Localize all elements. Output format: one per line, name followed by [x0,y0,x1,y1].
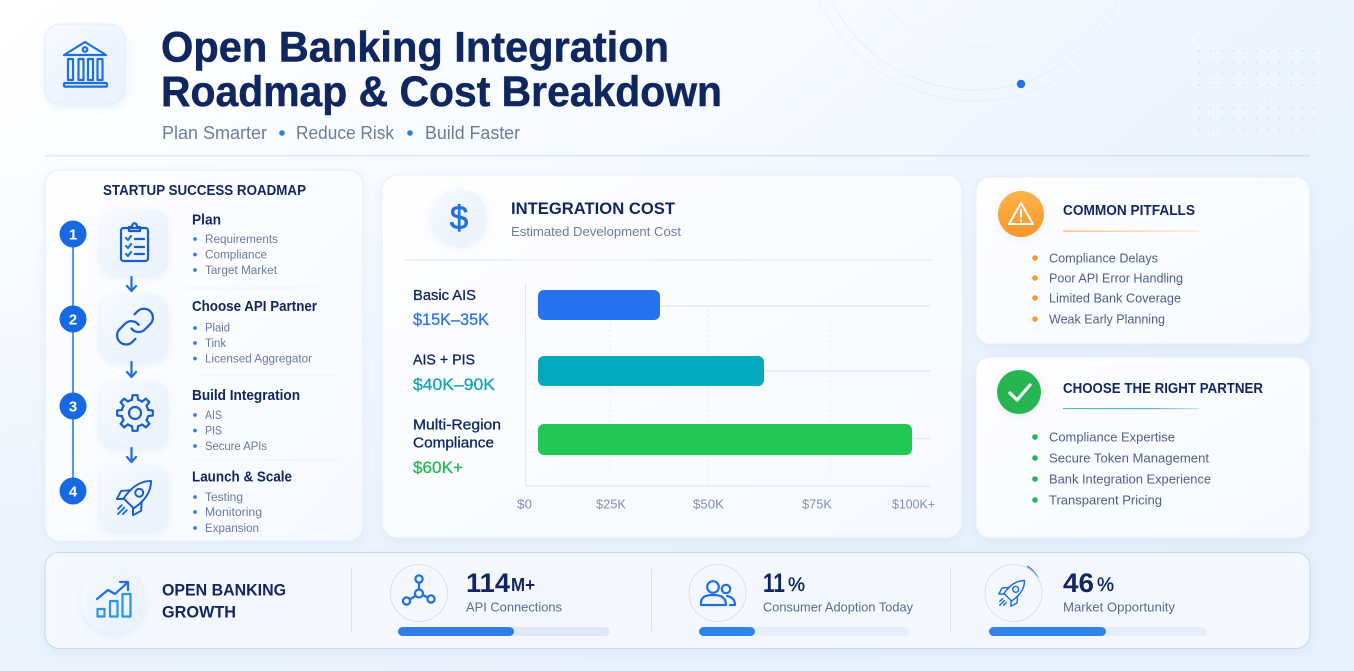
label: AIS + PIS [413,352,496,394]
bar: Multi-Region Compliance [538,424,912,455]
arrow 3 [127,448,136,462]
step 4 text [192,470,292,535]
icon: gear [100,381,168,447]
axis labels: $25K [596,498,627,512]
step 4 number [60,478,86,504]
step 4 text: Testing [205,492,243,504]
label: Basic AIS: $15K–35K [413,310,490,329]
label: Multi-Region Compliance [413,418,501,477]
label: Multi-Region Compliance: Multi-Region [413,418,501,434]
step 2 number: 2 [69,312,77,328]
growth heading [162,582,286,622]
bar: Basic AIS [538,290,660,320]
pitfalls list: Compliance Delays [1049,250,1158,266]
partner heading: CHOOSE THE RIGHT PARTNER [1063,381,1263,397]
stat: consumer adoption: Consumer Adoption Today [763,600,913,614]
arrow 1 [127,277,136,291]
step 2 text: Licensed Aggregator [205,354,312,366]
axis labels [517,498,935,512]
step 2 text: Choose API Partner [192,299,317,315]
icon: check [997,370,1041,414]
icon: growth chart [80,567,146,633]
partner list: Transparent Pricing [1049,492,1162,508]
timeline line [72,234,74,491]
bar chart [517,283,935,512]
step 3 text [192,388,300,453]
axis labels: $100K+ [892,498,935,512]
panel: choose the right partner [976,357,1310,538]
icon: clipboard [100,209,168,275]
label: AIS + PIS: AIS + PIS [413,352,475,368]
step 2 text: Tink [205,338,226,350]
stat: consumer adoption [689,564,913,636]
stat: API connections [390,564,610,636]
pitfalls list [1032,250,1183,326]
step 1 text: Compliance [205,250,267,262]
step 4 number: 4 [69,484,78,500]
arrow 2 [127,362,136,377]
icon: warning [998,191,1044,237]
pitfalls list: Poor API Error Handling [1049,270,1183,286]
step 3 text: Secure APIs [205,441,267,453]
roadmap heading: STARTUP SUCCESS ROADMAP [103,183,306,199]
step 3 text: AIS [205,410,222,422]
step 4 text: Launch & Scale [192,470,292,486]
partner list [1032,430,1211,508]
step 3 text: Build Integration [192,388,300,404]
label: Multi-Region Compliance: Compliance [413,436,494,452]
pitfalls heading: COMMON PITFALLS [1063,203,1195,219]
partner list: Compliance Expertise [1049,430,1175,444]
partner list: Secure Token Management [1049,450,1209,466]
title: Roadmap & Cost Breakdown [161,68,722,116]
axis labels: $75K [802,498,833,512]
panel: open banking growth [45,552,1310,648]
subtitle [162,123,520,143]
stat: market opportunity: 46 [1063,568,1094,598]
stat: consumer adoption: 11 [763,568,785,598]
stat: market opportunity: % [1097,575,1114,596]
label: AIS + PIS: $40K–90K [413,375,496,394]
step 1 text [192,212,278,277]
partner list: Bank Integration Experience [1049,472,1211,486]
pitfalls list: Limited Bank Coverage [1049,290,1181,306]
label: Basic AIS: Basic AIS [413,288,476,304]
axis labels: $50K [693,498,725,512]
panel: integration cost [382,175,962,538]
growth heading: OPEN BANKING [162,582,286,600]
step 4 text: Monitoring [205,507,262,519]
stat: API connections: API Connections [466,600,562,614]
step 1 text: Target Market [205,265,278,277]
title: Open Banking Integration [161,24,669,72]
step 1 number: 1 [69,226,77,244]
step 2 text: Plaid [205,322,230,334]
stat: API connections: 114 [466,568,510,598]
icon: rocket [100,465,168,530]
stat: API connections: M+ [511,575,535,595]
step 4 text: Expansion [205,523,259,535]
title [161,24,722,116]
cost heading: INTEGRATION COST [511,199,676,218]
icon: bank [45,24,125,104]
step 2 text [192,299,317,366]
subtitle: Plan Smarter [162,123,267,143]
subtitle: Reduce Risk [296,123,395,143]
step 1 text: Plan [192,212,221,228]
panel: common pitfalls [976,177,1310,344]
step 3 number [60,392,86,420]
icon: dollar [431,189,487,245]
icon: chain link [100,294,168,360]
subtitle: Build Faster [425,123,520,143]
step 3 number: 3 [69,398,77,416]
axis labels: $0 [517,498,532,512]
pitfalls list: Weak Early Planning [1049,312,1165,326]
label: Multi-Region Compliance: $60K+ [413,458,463,477]
bar: AIS + PIS [538,356,764,386]
step 1 number [60,220,86,248]
step 2 number [60,306,86,332]
growth heading: GROWTH [162,604,236,622]
cost subheading: Estimated Development Cost [511,225,682,239]
stat: market opportunity [985,564,1207,636]
icon: dollar: $ [450,199,468,236]
label: Basic AIS [413,288,490,329]
stat: market opportunity: Market Opportunity [1063,600,1176,614]
panel: startup success roadmap [45,170,363,541]
step 1 text: Requirements [205,234,278,246]
stat: consumer adoption: % [788,575,805,596]
step 3 text: PIS [205,426,222,438]
